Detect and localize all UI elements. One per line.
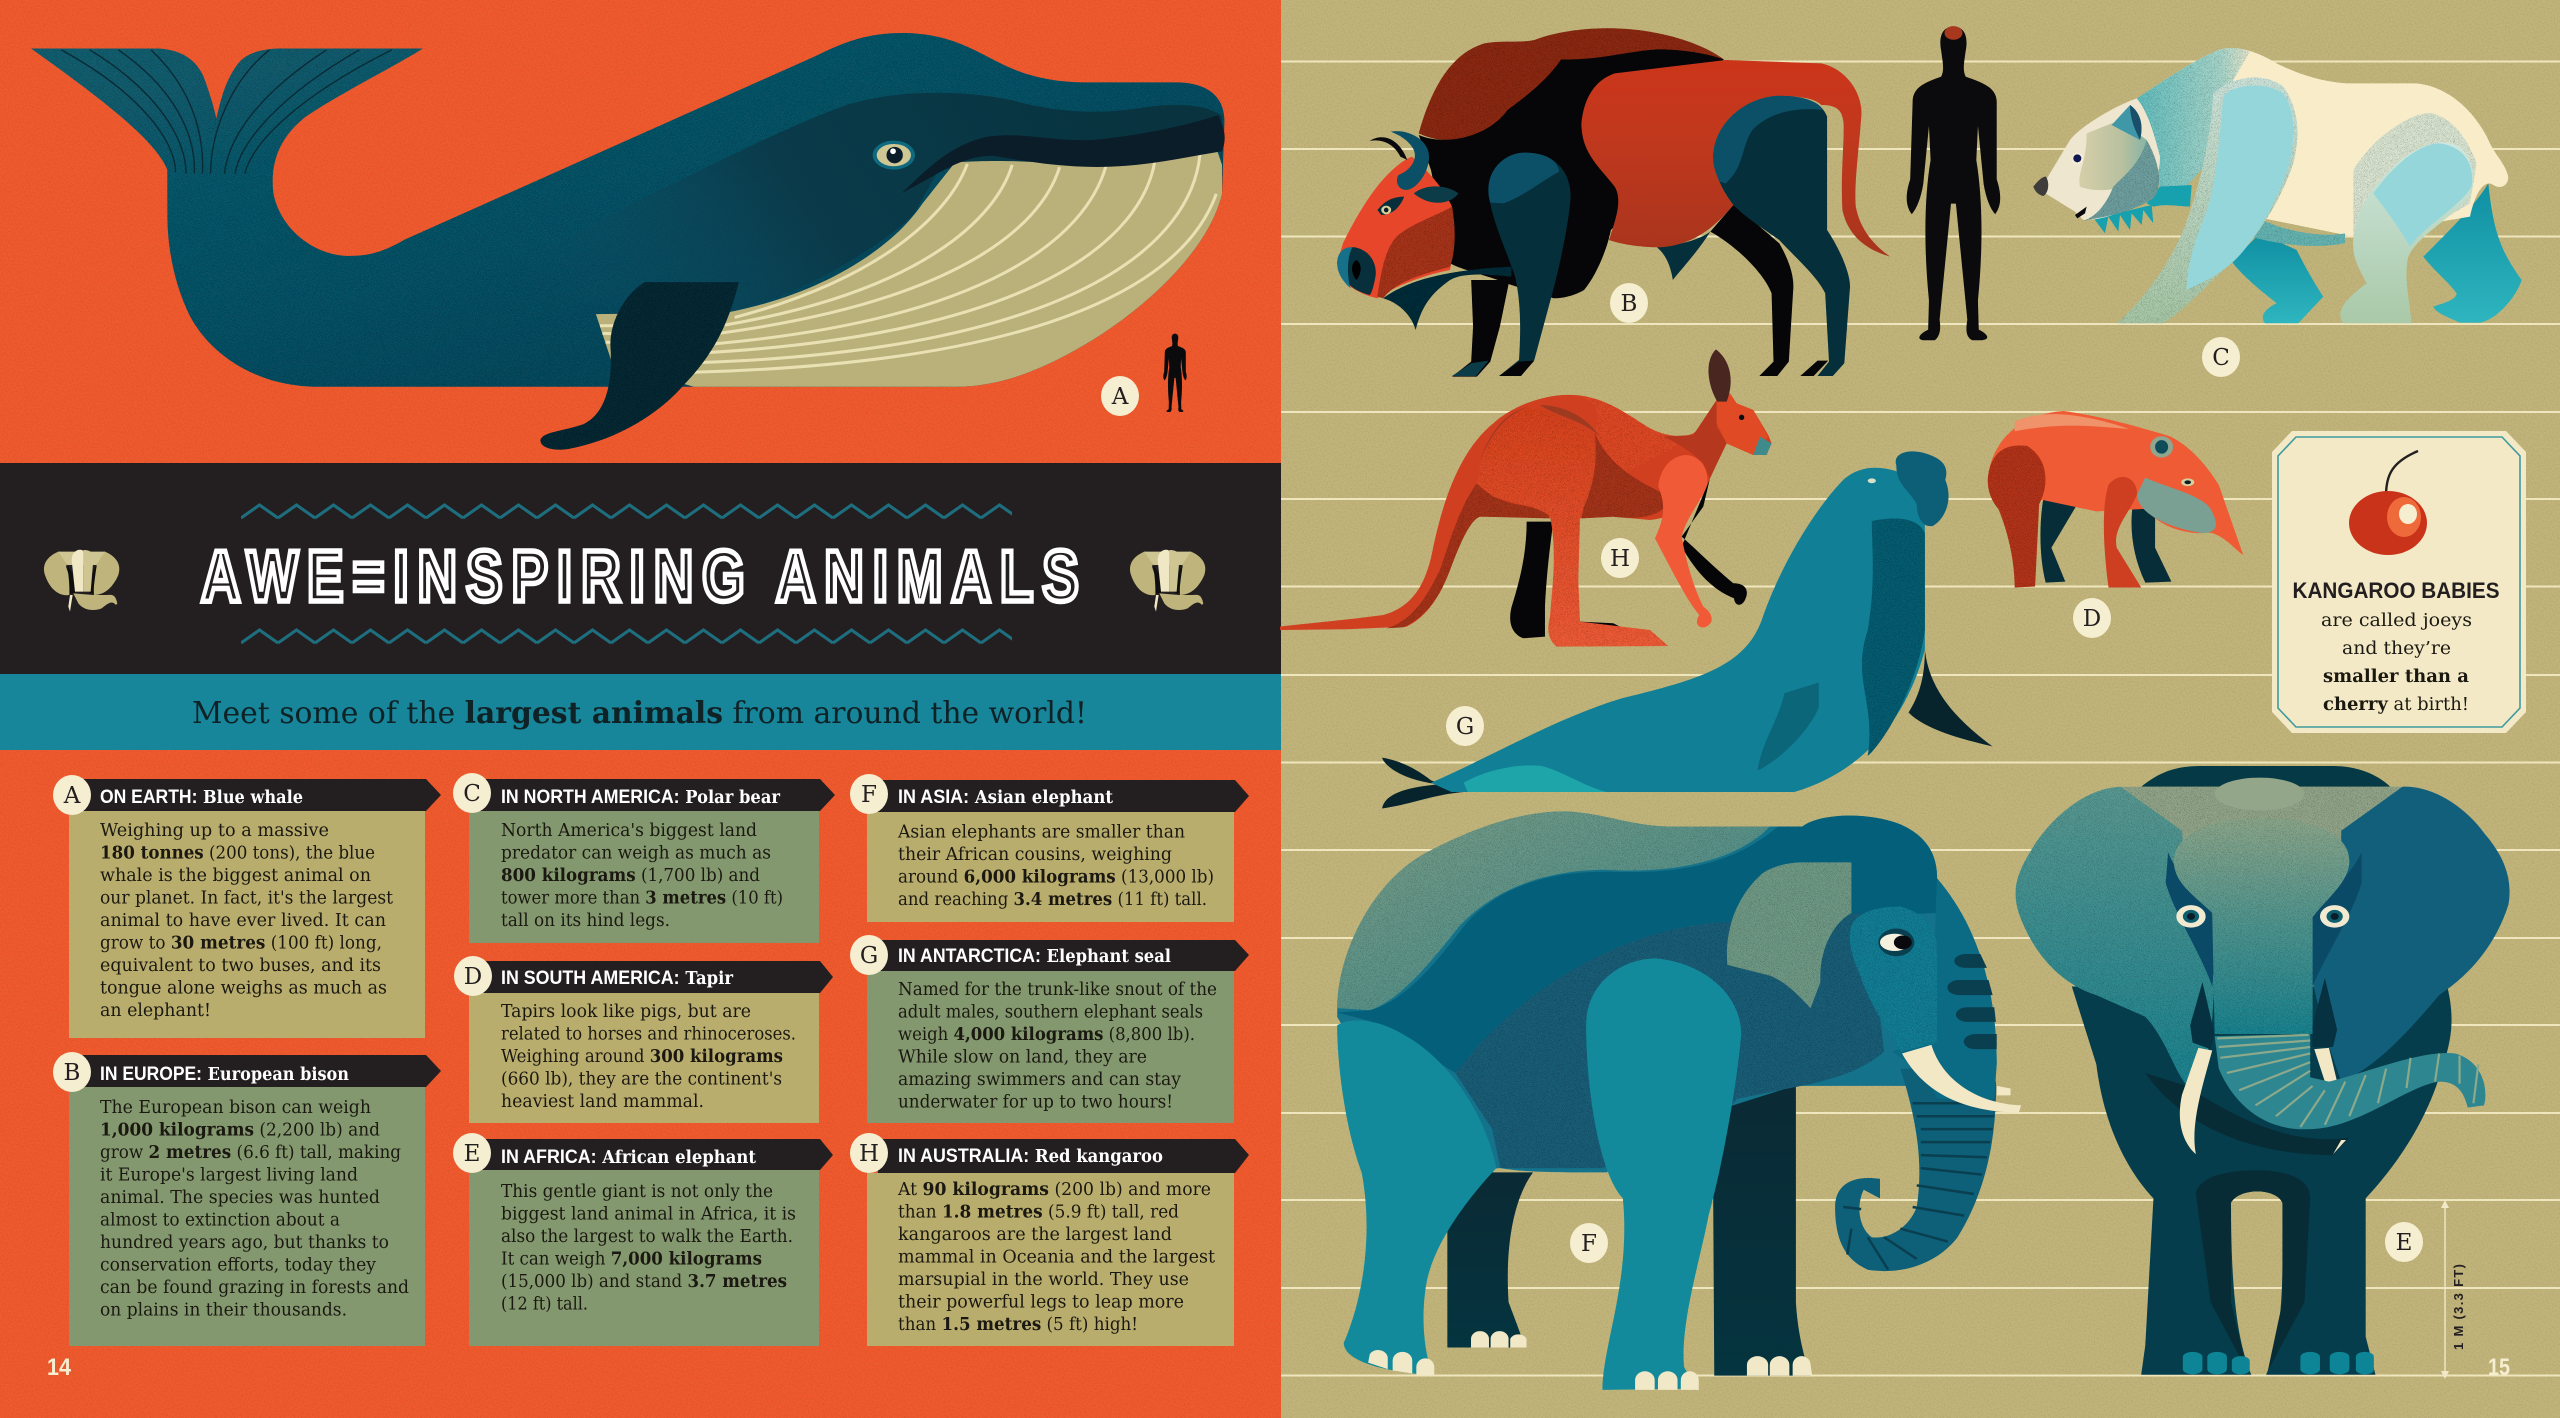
panel B: European bison: 1,000 kilograms (2,200 lb) and xyxy=(100,1120,380,1140)
panel A: blue whale: animal to have ever lived. It can xyxy=(100,911,386,931)
label A on whale xyxy=(1101,376,1139,416)
panel H: red kangaroo: H xyxy=(859,1141,879,1167)
illustration: Asian elephant xyxy=(1337,811,2021,1390)
label D xyxy=(2073,598,2111,638)
panel G: elephant seal: underwater for up to two hours! xyxy=(898,1092,1173,1112)
panel D: tapir: related to horses and rhinoceroses. xyxy=(501,1024,796,1044)
panel C: polar bear: IN NORTH AMERICA: Polar bear xyxy=(501,787,781,808)
illustration: tapir xyxy=(1988,411,2243,587)
panel A: blue whale: whale is the biggest animal on xyxy=(100,866,371,886)
panel E: African elephant: IN AFRICA: African elephant xyxy=(501,1147,756,1168)
panel B: European bison: conservation efforts, today they xyxy=(100,1256,376,1276)
panel C: polar bear: 800 kilograms (1,700 lb) and xyxy=(501,866,760,886)
label C xyxy=(2202,337,2240,377)
panel H: red kangaroo: their powerful legs to leap more xyxy=(898,1292,1184,1312)
panel G: elephant seal xyxy=(850,935,1249,1123)
subtitle band xyxy=(0,674,1281,750)
panel H: red kangaroo: marsupial in the world. They use xyxy=(898,1270,1189,1290)
panel A: blue whale: equivalent to two buses, and its xyxy=(100,956,381,976)
panel B: European bison: can be found grazing in forests and xyxy=(100,1278,409,1298)
panel F: Asian elephant: their African cousins, weighing xyxy=(898,845,1172,865)
label C: C xyxy=(2212,345,2230,371)
callout card: kangaroo babies: are called joeys xyxy=(2321,611,2472,631)
illustration: European bison xyxy=(1337,28,1890,377)
icon: elephant head right xyxy=(1130,550,1205,612)
panel B: European bison: The European bison can weigh xyxy=(100,1098,371,1118)
title banner xyxy=(0,463,1281,674)
panel C: polar bear xyxy=(453,773,835,943)
panel F: Asian elephant xyxy=(850,774,1249,922)
callout card: kangaroo babies: smaller than a xyxy=(2323,667,2469,687)
panel D: tapir: D xyxy=(464,964,482,990)
label D: D xyxy=(2083,606,2101,632)
label F xyxy=(1570,1223,1608,1263)
panel F: Asian elephant: Asian elephants are smaller than xyxy=(897,822,1185,842)
panel D: tapir xyxy=(454,956,833,1123)
panel B: European bison: animal. The species was hunted xyxy=(100,1188,380,1208)
panel C: polar bear: North America's biggest land xyxy=(501,821,757,841)
panel G: elephant seal: IN ANTARCTICA: Elephant seal xyxy=(898,946,1171,967)
panel C: polar bear: tower more than 3 metres (10 ft) xyxy=(501,888,783,908)
panel C: polar bear: C xyxy=(463,781,481,807)
label G xyxy=(1446,706,1484,746)
panel A: blue whale xyxy=(53,775,441,1038)
main title: AWE=INSPIRING ANIMALS xyxy=(201,536,1079,617)
illustration: red kangaroo xyxy=(1280,349,1772,647)
panel F: Asian elephant: around 6,000 kilograms (13,000 lb) xyxy=(898,868,1214,888)
panel D: tapir: Weighing around 300 kilograms xyxy=(501,1047,783,1067)
panel E: African elephant: E xyxy=(464,1141,480,1167)
panel B: European bison: B xyxy=(64,1060,80,1086)
panel E: African elephant: biggest land animal in Africa, it is xyxy=(501,1204,796,1224)
illustration: polar bear xyxy=(2033,48,2522,323)
panel A: blue whale: Weighing up to a massive xyxy=(100,821,329,841)
zigzag decorations xyxy=(241,500,1012,648)
scale bar: one metre xyxy=(2441,1200,2466,1379)
panel B: European bison: almost to extinction about a xyxy=(100,1210,340,1230)
panel H: red kangaroo: IN AUSTRALIA: Red kangaroo xyxy=(898,1146,1163,1167)
panel F: Asian elephant: and reaching 3.4 metres (11 ft) tall. xyxy=(898,890,1207,910)
panel E: African elephant: This gentle giant is not only the xyxy=(501,1182,773,1202)
panel B: European bison: on plains in their thousands. xyxy=(100,1300,347,1320)
panel E: African elephant: (12 ft) tall. xyxy=(501,1294,588,1314)
label H xyxy=(1601,538,1639,578)
panel D: tapir: (660 lb), they are the continent's xyxy=(501,1070,782,1090)
panel B: European bison: hundred years ago, but thanks to xyxy=(100,1233,389,1253)
panel H: red kangaroo xyxy=(850,1133,1249,1346)
page number 15: 15 xyxy=(2488,1354,2510,1381)
panel A: blue whale: 180 tonnes (200 tons), the blue xyxy=(100,844,375,864)
panel D: tapir: Tapirs look like pigs, but are xyxy=(501,1002,751,1022)
panel B: European bison: IN EUROPE: European bison xyxy=(100,1064,349,1085)
panel A: blue whale: tongue alone weighs as much as xyxy=(100,978,387,998)
human silhouette for scale xyxy=(1907,26,2000,340)
panel D: tapir: heaviest land mammal. xyxy=(501,1092,704,1112)
panel A: blue whale: our planet. In fact, it's the largest xyxy=(100,888,393,908)
label B xyxy=(1610,283,1648,323)
right page background xyxy=(1281,0,2560,1418)
callout card: kangaroo babies xyxy=(2272,431,2526,733)
page number 14: 14 xyxy=(47,1354,72,1381)
label G: G xyxy=(1456,714,1474,740)
panel H: red kangaroo: mammal in Oceania and the largest xyxy=(898,1248,1215,1268)
panel A: blue whale: an elephant! xyxy=(100,1001,211,1021)
label H: H xyxy=(1610,546,1630,572)
panel E: African elephant: (15,000 lb) and stand 3.7 metres xyxy=(501,1272,787,1292)
panel F: Asian elephant: IN ASIA: Asian elephant xyxy=(898,787,1113,808)
panel B: European bison xyxy=(53,1052,441,1346)
icon: elephant head left xyxy=(44,550,119,612)
panel G: elephant seal: G xyxy=(860,943,878,969)
panel E: African elephant: It can weigh 7,000 kilograms xyxy=(501,1250,762,1270)
panel C: polar bear: predator can weigh as much as xyxy=(501,844,771,864)
callout card: kangaroo babies: cherry at birth! xyxy=(2323,695,2469,715)
left page background xyxy=(0,0,1281,1418)
panel A: blue whale: A xyxy=(63,783,81,809)
panel H: red kangaroo: than 1.8 metres (5.9 ft) tall, red xyxy=(898,1202,1179,1222)
scale bar: one metre: 1 M (3.3 FT) xyxy=(2451,1264,2466,1350)
panel C: polar bear: tall on its hind legs. xyxy=(501,911,670,931)
illustration: elephant seal xyxy=(1382,451,1993,808)
panel E: African elephant: also the largest to walk the Earth. xyxy=(501,1227,793,1247)
panel A: blue whale: ON EARTH: Blue whale xyxy=(100,787,303,808)
panel G: elephant seal: While slow on land, they are xyxy=(898,1048,1147,1068)
callout card: kangaroo babies: KANGAROO BABIES xyxy=(2292,578,2500,603)
panel H: red kangaroo: than 1.5 metres (5 ft) high! xyxy=(898,1315,1138,1335)
icon: cherry xyxy=(2349,451,2427,555)
callout card: kangaroo babies: and they’re xyxy=(2342,639,2451,659)
panel E: African elephant xyxy=(453,1133,833,1346)
label A on whale: A xyxy=(1111,384,1129,410)
panel G: elephant seal: weigh 4,000 kilograms (8,800 lb). xyxy=(898,1025,1195,1045)
panel B: European bison: grow 2 metres (6.6 ft) tall, making xyxy=(100,1143,401,1163)
illustration: blue whale xyxy=(31,33,1225,450)
label F: F xyxy=(1581,1231,1597,1257)
panel G: elephant seal: Named for the trunk-like snout of the xyxy=(898,980,1217,1000)
panel H: red kangaroo: At 90 kilograms (200 lb) and more xyxy=(897,1180,1211,1200)
panel G: elephant seal: adult males, southern elephant seals xyxy=(898,1002,1203,1022)
panel A: blue whale: grow to 30 metres (100 ft) long, xyxy=(100,934,382,954)
label E xyxy=(2385,1222,2423,1262)
panel F: Asian elephant: F xyxy=(861,782,877,808)
label B: B xyxy=(1621,291,1637,317)
subtitle band: Meet some of the largest animals from around the world! xyxy=(192,696,1087,731)
human scale figure beside whale xyxy=(1163,334,1187,412)
panel G: elephant seal: amazing swimmers and can stay xyxy=(898,1070,1181,1090)
panel H: red kangaroo: kangaroos are the largest land xyxy=(898,1225,1172,1245)
illustration: African elephant xyxy=(2016,766,2510,1375)
label E: E xyxy=(2396,1230,2412,1256)
panel B: European bison: it Europe's largest living land xyxy=(100,1166,358,1186)
panel D: tapir: IN SOUTH AMERICA: Tapir xyxy=(501,968,734,989)
